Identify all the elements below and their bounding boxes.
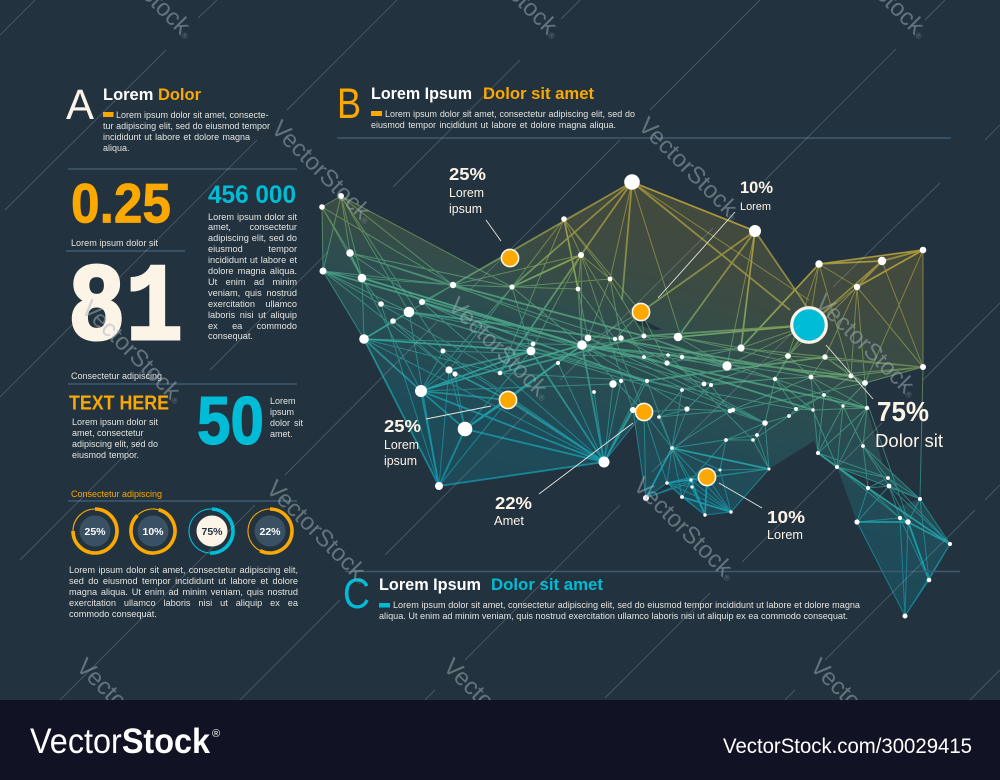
text: intro C [379, 600, 860, 621]
label: 25% top: Lorem [449, 186, 484, 200]
label: 10% bottom [767, 507, 805, 542]
text: under donuts [69, 564, 298, 619]
text: column beside 81: Ut enim ad minim [208, 277, 297, 287]
heading: Dolor sit amet: Dolor sit amet [483, 84, 594, 103]
text: intro C: aliqua. Ut enim ad minim veniam, quis nostrud exercitation ullamco laboris nisi ut aliquip ex ea commodo consequat. [379, 610, 848, 620]
panel B header graphics [337, 80, 951, 139]
label: 25% lower left [384, 416, 421, 468]
donut 75%: 75% [201, 526, 223, 538]
text: column beside 81: veniam, quis nostrud [208, 288, 297, 298]
text: under TEXT HERE: eiusmod tempor. [72, 450, 139, 460]
orange highlight nodes [499, 249, 716, 486]
network nodes [319, 174, 952, 618]
label: 22%: 22% [495, 493, 532, 513]
section letter B: B [337, 80, 361, 128]
label: 25% top [449, 164, 486, 216]
footer image id: VectorStock.com/30029415 [723, 735, 972, 758]
small label: consectetur white: Consectetur adipiscing [71, 371, 162, 381]
watermark labels: VectorStock® [261, 475, 375, 589]
figure 50: 50 [197, 383, 264, 459]
text: column beside 81: ex ea commodo [208, 321, 297, 331]
donut 22%: 22% [259, 526, 281, 538]
text: column beside 81: exercitation ullamco [208, 299, 297, 309]
figure 456 000: 456 000 [208, 181, 296, 209]
heading: Lorem Dolor: Lorem Dolor [103, 85, 201, 104]
watermark labels: VectorStock® [810, 289, 924, 403]
label: 10% top: 10% [740, 179, 773, 197]
text: column beside 81 [208, 212, 297, 341]
panel C footer note [343, 570, 960, 621]
footer bar [0, 700, 1000, 780]
text: column beside 81: amet, consectetur [208, 222, 297, 232]
text: column beside 81: eiusmod tempor [208, 244, 297, 254]
heading: Dolor sit amet: Dolor sit amet [491, 575, 603, 594]
label: 10% top [740, 179, 773, 213]
rule C [345, 570, 960, 572]
donut 75% [189, 509, 233, 553]
text: column beside 81: laboris nisi ut aliquip [208, 310, 297, 320]
text: intro B: Lorem ipsum dolor sit amet, consectetur adipiscing elit, sed do [385, 108, 635, 118]
donut 10% [131, 509, 175, 553]
network thick edges [323, 182, 950, 580]
text: intro A [103, 110, 270, 153]
cyan highlight node [792, 308, 826, 342]
small label: consectetur orange: Consectetur adipiscing [71, 489, 162, 499]
bullet marker C [379, 603, 390, 608]
text: beside 50: dolor sit [270, 418, 303, 428]
label: 22% [494, 493, 532, 528]
label: 22%: Amet [494, 514, 525, 528]
rules [66, 169, 297, 501]
text: intro A: Lorem ipsum dolor sit amet, consecte- [116, 110, 269, 120]
heading: Lorem Ipsum: Lorem Ipsum [379, 575, 481, 594]
label: 25% lower left: ipsum [384, 454, 417, 468]
rule B [337, 137, 951, 139]
text: intro B [371, 108, 635, 130]
section letter C: C [343, 570, 370, 618]
panel C graphics [343, 570, 960, 618]
text: beside 50: Lorem [270, 396, 296, 406]
text: under donuts: exercitation ullamco laboris nisi ut aliquip ex ea [69, 598, 298, 608]
text: under donuts: Lorem ipsum dolor sit amet, consectetur adipiscing elit, [69, 564, 298, 574]
watermark labels: VectorStock® [266, 115, 380, 229]
label: 10% top: Lorem [740, 201, 771, 213]
heading: TEXT HERE: TEXT HERE [69, 392, 169, 414]
text: column beside 81: Lorem ipsum dolor sit [208, 212, 297, 222]
label: 10% bottom: Lorem [767, 528, 803, 542]
text: under TEXT HERE [72, 416, 158, 460]
footer registered mark: ® [212, 728, 220, 740]
text: under TEXT HERE: adipiscing elit, sed do [72, 438, 158, 448]
text: beside 50 [270, 396, 303, 439]
text: under TEXT HERE: Lorem ipsum dolor sit [72, 416, 158, 426]
bullet marker B [371, 111, 382, 116]
footer text [30, 722, 972, 761]
text: column beside 81: adipiscing elit, sed do [208, 233, 297, 243]
text: under donuts: sed do eiusmod tempor incididunt ut labore et dolore [69, 576, 298, 586]
text: under donuts: commodo consequat. [69, 608, 157, 618]
donut 25%: 25% [84, 526, 106, 538]
donut 22% [248, 509, 292, 553]
figure 0.25: 0.25 [71, 172, 171, 234]
text: beside 50: ipsum [270, 407, 294, 417]
text: intro C: Lorem ipsum dolor sit amet, consectetur adipiscing elit, sed do eiusmod tempor incididunt ut labore et dolore magna [393, 600, 860, 610]
text: beside 50: amet. [270, 429, 293, 439]
watermark labels: VectorStock® [628, 472, 742, 586]
label: 25% top: 25% [449, 164, 486, 184]
bullet marker A [103, 112, 114, 117]
text: intro B: eiusmod tempor incididunt ut labore et dolore magna aliqua. [371, 120, 616, 130]
small label: lorem ipsum: Lorem ipsum dolor sit [71, 238, 158, 248]
network thin edges [322, 182, 950, 616]
label: 25% lower left: 25% [384, 416, 421, 436]
panel A graphics [66, 81, 297, 555]
watermark labels: VectorStock® [443, 292, 557, 406]
panel B header [337, 80, 951, 139]
label: 25% lower left: Lorem [384, 438, 419, 452]
network fills [322, 182, 950, 616]
donut 25% [73, 509, 117, 553]
text: under TEXT HERE: amet, consectetur [72, 428, 144, 438]
text: column beside 81: dolore magna aliqua. [208, 266, 297, 276]
text: under donuts: magna aliqua. Ut enim ad minim veniam, quis nostrud [69, 586, 298, 596]
watermark labels: VectorStock® [76, 295, 190, 409]
text: column beside 81: incididunt ut labore et [208, 255, 297, 265]
figure 81: 81 [68, 248, 183, 373]
watermark labels: VectorStock® [633, 112, 747, 226]
footer logo: VectorStock [30, 722, 210, 761]
text: intro A: aliqua. [103, 142, 130, 152]
text: column beside 81: consequat. [208, 331, 253, 341]
heading: Lorem Ipsum: Lorem Ipsum [371, 84, 472, 103]
donut 10%: 10% [142, 526, 164, 538]
section letter A: A [66, 81, 94, 129]
panel A: key figures [66, 81, 303, 619]
text: intro A: tur adipiscing elit, sed do eiusmod tempor [103, 120, 270, 130]
label: 25% top: ipsum [449, 202, 482, 216]
leader lines [426, 212, 873, 508]
label: 75%: 75% [877, 396, 929, 427]
text: intro A: incididunt ut labore et dolore magna [103, 132, 250, 142]
label: 75%: Dolor sit [875, 431, 943, 451]
label: 75% [875, 396, 943, 451]
label: 10% bottom: 10% [767, 507, 805, 527]
